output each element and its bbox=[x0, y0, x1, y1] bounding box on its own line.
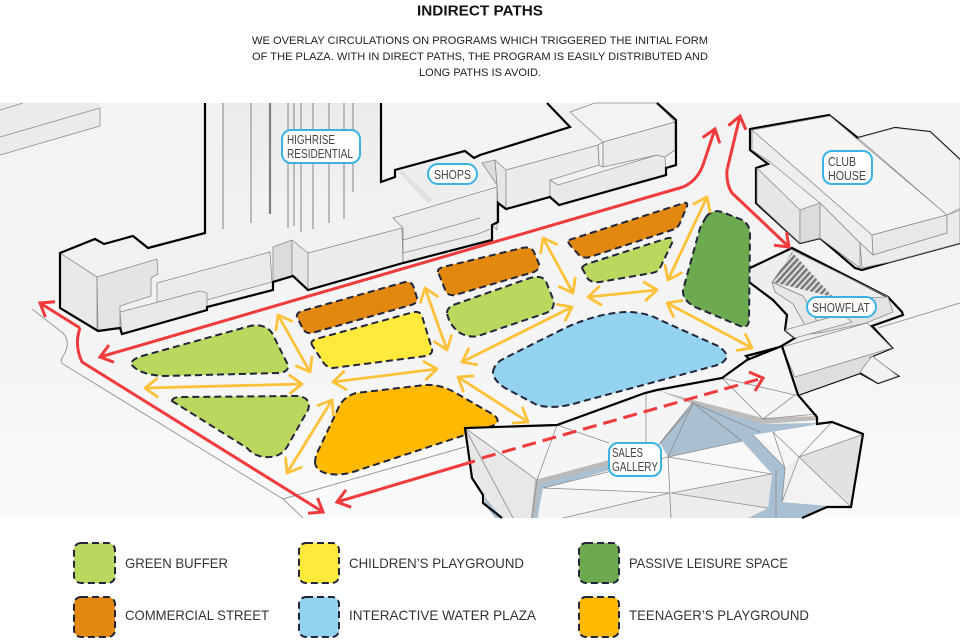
programme zones bbox=[132, 203, 750, 475]
legend item: teenager's playground: TEENAGER’S PLAYGROUND bbox=[629, 607, 809, 623]
red circulation arrows bbox=[40, 116, 789, 512]
glazed blue facets bbox=[660, 403, 742, 457]
label: showflat: SHOWFLAT bbox=[812, 301, 870, 315]
title: INDIRECT PATHS bbox=[417, 2, 543, 20]
zone: interactive water plaza bbox=[493, 312, 726, 407]
arrow: east route bbox=[727, 116, 740, 170]
intro text block bbox=[252, 35, 708, 79]
zone: commercial street west bbox=[297, 282, 417, 333]
legend item: children's playground bbox=[299, 543, 524, 583]
site plan diagram bbox=[0, 103, 960, 518]
intro text block: LONG PATHS IS AVOID. bbox=[419, 67, 541, 79]
legend item: passive leisure space: PASSIVE LEISURE SPACE bbox=[629, 555, 788, 571]
intro text block: WE OVERLAY CIRCULATIONS ON PROGRAMS WHICH TRIGGERED THE INITIAL FORM bbox=[252, 35, 708, 47]
zone: teenager's playground bbox=[315, 385, 498, 474]
label: highrise residential: HIGHRISE bbox=[287, 133, 335, 147]
intro text block: OF THE PLAZA. WITH IN DIRECT PATHS, THE PROGRAM IS EASILY DISTRIBUTED AND bbox=[252, 51, 708, 63]
legend item: green buffer bbox=[74, 543, 228, 583]
legend item: commercial street bbox=[74, 597, 269, 637]
label: highrise residential bbox=[282, 130, 360, 163]
legend bbox=[74, 543, 809, 637]
zone: green buffer centre bbox=[447, 277, 554, 337]
facet lines bbox=[465, 378, 864, 518]
arrow: north edge route bbox=[683, 129, 715, 187]
label: sales gallery: GALLERY bbox=[612, 460, 659, 474]
label: highrise residential: RESIDENTIAL bbox=[287, 147, 353, 161]
legend item: interactive water plaza bbox=[299, 597, 537, 637]
zone: commercial street centre bbox=[438, 248, 539, 295]
label: club house: HOUSE bbox=[828, 169, 866, 183]
label: shops bbox=[428, 164, 477, 184]
arrow: south route to gallery bbox=[337, 461, 475, 502]
legend item: teenager's playground bbox=[579, 597, 809, 637]
club house building bbox=[750, 115, 960, 270]
label: sales gallery: SALES bbox=[612, 446, 643, 460]
showflat building bbox=[745, 248, 903, 395]
zone: passive leisure space bbox=[683, 211, 750, 327]
legend item: commercial street: COMMERCIAL STREET bbox=[125, 607, 269, 623]
highrise residential and shops block bbox=[60, 103, 676, 334]
legend item: green buffer: GREEN BUFFER bbox=[125, 555, 228, 571]
arrow: dashed route through gallery bbox=[482, 378, 763, 458]
sales gallery building bbox=[465, 346, 864, 518]
label: showflat bbox=[807, 297, 876, 317]
zone: commercial street east bbox=[568, 203, 687, 258]
site boundary lines bbox=[32, 303, 960, 518]
label: club house: CLUB bbox=[828, 155, 856, 169]
arrow: west and south route bbox=[40, 303, 80, 328]
zone: green buffer south bbox=[172, 396, 309, 457]
legend item: passive leisure space bbox=[579, 543, 788, 583]
label: club house bbox=[823, 151, 872, 184]
zone: children's playground bbox=[312, 312, 432, 368]
legend item: children's playground: CHILDREN’S PLAYGROUND bbox=[349, 555, 524, 571]
neighbouring building top left bbox=[0, 103, 100, 155]
legend item: interactive water plaza: INTERACTIVE WATER PLAZA bbox=[349, 607, 537, 623]
zone: green buffer east bbox=[582, 238, 672, 282]
tower facade bbox=[222, 103, 395, 232]
label: shops: SHOPS bbox=[434, 168, 471, 182]
yellow two-way arrows bbox=[145, 197, 752, 473]
label: sales gallery bbox=[609, 443, 661, 476]
zone: green buffer west bbox=[132, 325, 288, 376]
